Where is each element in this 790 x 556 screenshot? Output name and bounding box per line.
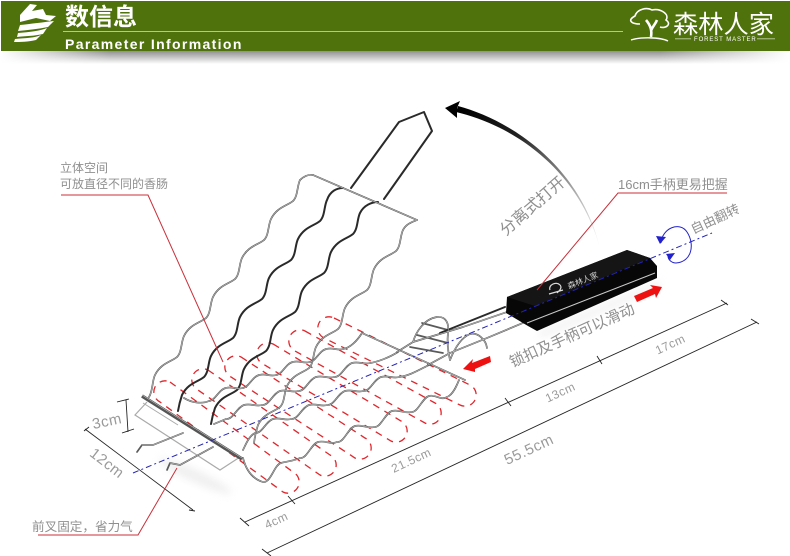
- callout: front fork: [32, 468, 177, 535]
- callout: adjustable space: [60, 160, 223, 362]
- dimension labels: [86, 331, 687, 532]
- arrow: slide right: [634, 285, 662, 302]
- label: 21.5cm: 21.5cm: [389, 445, 433, 476]
- callout: adjustable space: 立体空间: [60, 160, 108, 175]
- header shadow: [0, 51, 790, 64]
- label: separate opening: 分离式打开: [497, 173, 569, 239]
- sausage zones: red dashed capsules: [154, 317, 476, 493]
- front rail and fork: [135, 395, 242, 470]
- label: 4cm: 4cm: [262, 509, 290, 532]
- brand logo: [631, 9, 775, 43]
- label: 17cm: 17cm: [653, 331, 687, 357]
- icon: tree: [631, 9, 668, 41]
- icon: handle tree: [549, 283, 563, 294]
- soft ground shadow: [156, 454, 234, 498]
- label: 12cm: 12cm: [86, 445, 127, 482]
- label: sliding lock: 锁扣及手柄可以滑动: [507, 301, 637, 371]
- heading: english title: Parameter Information: [65, 36, 243, 52]
- header banner: [0, 1, 790, 64]
- rotation axis: blue dashed line: [133, 233, 712, 473]
- arrow: slide left: [463, 356, 491, 372]
- handle logo: 森林人家: [566, 270, 599, 291]
- icon: section logo: [14, 4, 56, 42]
- lower wire frame: [184, 333, 465, 482]
- handle: [506, 250, 660, 335]
- upper wire frame: [149, 112, 432, 443]
- brand name: 森林人家: [673, 11, 774, 39]
- label: 55.5cm: 55.5cm: [502, 431, 557, 469]
- callout: front fork: 前叉固定，省力气: [32, 519, 133, 534]
- callout: adjustable space: 可放直径不同的香肠: [60, 176, 168, 191]
- handle shadow: [540, 284, 660, 335]
- sliding lock and rods: [397, 307, 530, 365]
- label: 13cm: 13cm: [543, 379, 577, 405]
- product: wire basket: [135, 112, 530, 498]
- brand tagline: FOREST MASTER: [694, 37, 757, 43]
- arrow: opening arc: [445, 101, 600, 248]
- callout: handle grip: 16cm手柄更易把握: [618, 177, 728, 192]
- dimension lines: [84, 300, 759, 556]
- arrow: rotation circle: [656, 227, 691, 263]
- label: 3cm: 3cm: [91, 410, 123, 433]
- heading: chinese title: 数信息: [65, 4, 137, 31]
- callout: handle grip: [537, 177, 728, 290]
- label: free rotation: 自由翻转: [688, 201, 742, 237]
